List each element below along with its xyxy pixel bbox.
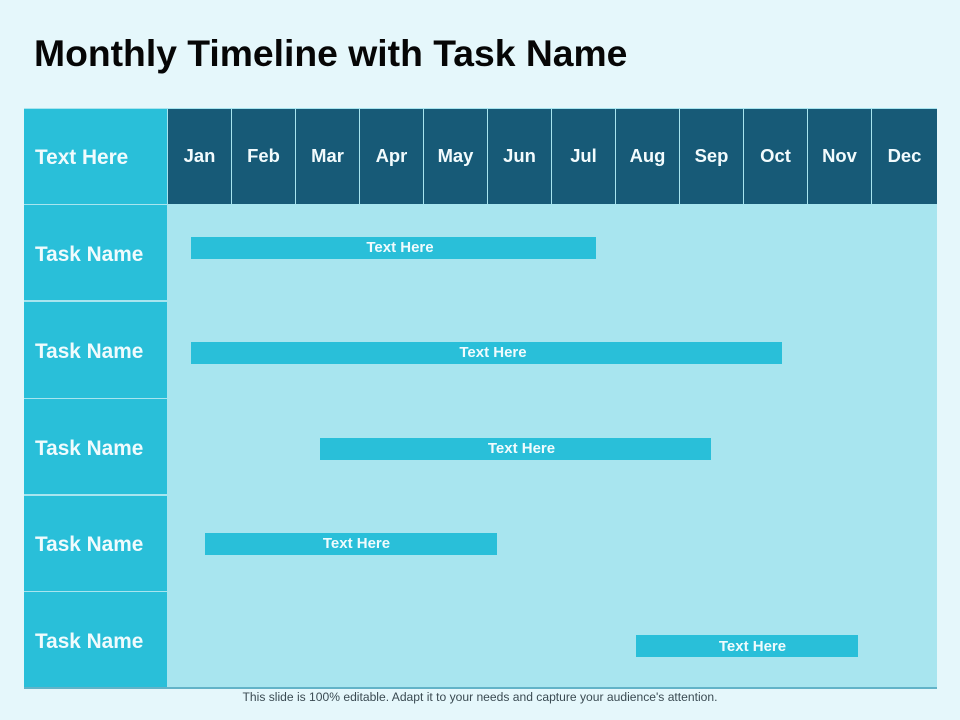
row label: task 4: [24, 496, 167, 591]
task bar 3: [320, 438, 711, 460]
month: Nov: Nov: [822, 145, 857, 166]
task bar 2: Text Here: [459, 344, 527, 360]
row label: task 1: [24, 205, 167, 300]
month: Aug: [616, 109, 679, 204]
month: Feb: Feb: [247, 145, 280, 166]
heading cell: text here: [24, 109, 167, 204]
row label: task 1: Task Name: [35, 243, 143, 266]
row label: task 5: Task Name: [35, 630, 143, 653]
task bar 2: [191, 342, 782, 364]
task bar 5: Text Here: [719, 638, 786, 654]
task bar 1: Text Here: [366, 238, 434, 256]
title: Monthly Timeline with Task Name: [34, 32, 627, 74]
row label: task 2: Task Name: [35, 340, 143, 362]
task bar 5: [636, 635, 858, 657]
month: Nov: [808, 109, 871, 204]
month: Jan: Jan: [184, 145, 215, 166]
task bar 4: Text Here: [323, 534, 390, 552]
month: Mar: [296, 109, 359, 204]
row label: task 3: Task Name: [35, 437, 143, 460]
month: Jan: [168, 109, 231, 204]
month: Jul: Jul: [570, 145, 597, 166]
panel: timeline table: [24, 108, 937, 689]
row label: task 5: [24, 592, 167, 687]
month: Mar: Mar: [311, 145, 344, 166]
month: Dec: [872, 109, 937, 204]
month: Apr: Apr: [376, 145, 407, 166]
footer note: This slide is 100% editable. Adapt it to your needs and capture your audience's attention.: [243, 690, 717, 704]
row label: task 2: [24, 302, 167, 398]
task bar 3: Text Here: [488, 440, 555, 456]
month: Oct: [744, 109, 807, 204]
month: Jun: Jun: [503, 145, 536, 166]
month: Aug: Aug: [630, 145, 665, 166]
heading cell: text here: Text Here: [35, 146, 128, 169]
month: Sep: Sep: [695, 145, 728, 166]
month: Apr: [360, 109, 423, 204]
month: May: [424, 109, 487, 204]
month: May: May: [438, 145, 473, 166]
month: Jun: [488, 109, 551, 204]
month: Feb: [232, 109, 295, 204]
month: Dec: Dec: [888, 145, 921, 166]
month: Sep: [680, 109, 743, 204]
row label: task 4: Task Name: [35, 533, 143, 556]
row label: task 3: [24, 399, 167, 494]
month: Jul: [552, 109, 615, 204]
month: Oct: Oct: [760, 145, 791, 166]
task bar 4: [205, 533, 497, 555]
task bar 1: [191, 237, 596, 259]
